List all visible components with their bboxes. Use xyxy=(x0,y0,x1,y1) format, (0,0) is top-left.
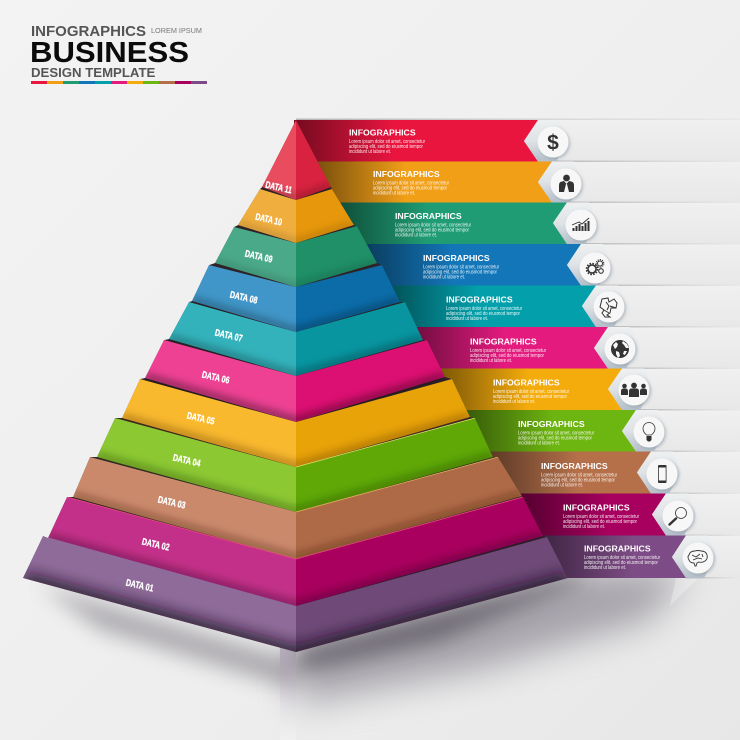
bar 5 teal: incididunt ut labore et. xyxy=(446,316,488,322)
bar 2 orange: Lorem ipsum dolor sit amet, consectetur xyxy=(373,180,449,186)
bar 7 amber: adipiscing elit, sed do eiusmod tempor xyxy=(493,394,567,400)
bar 11 purple: adipiscing elit, sed do eiusmod tempor xyxy=(584,560,658,566)
icon: phone xyxy=(646,458,678,490)
icon: magnifier xyxy=(662,500,694,532)
bar 1 red: adipiscing elit, sed do eiusmod tempor xyxy=(349,144,423,150)
bar 7 amber: Lorem ipsum dolor sit amet, consectetur xyxy=(493,389,569,395)
icon: dollar xyxy=(538,126,568,158)
label: data 01: DATA 01 xyxy=(125,578,155,595)
bar 10 magenta xyxy=(520,494,696,536)
bar 3 green: Lorem ipsum dolor sit amet, consectetur xyxy=(395,222,471,228)
layer 02 xyxy=(48,497,543,606)
bar 2 orange: incididunt ut labore et. xyxy=(373,190,415,196)
bar 2 orange xyxy=(316,162,582,202)
title: infographics: INFOGRAPHICS xyxy=(31,23,146,40)
bar 8 lime: adipiscing elit, sed do eiusmod tempor xyxy=(518,436,592,442)
bar 4 blue: incididunt ut labore et. xyxy=(423,274,465,280)
bar 7 amber: incididunt ut labore et. xyxy=(493,399,535,405)
bar 8 lime: Lorem ipsum dolor sit amet, consectetur xyxy=(518,430,594,436)
bar 6 pink: INFOGRAPHICS xyxy=(470,336,537,346)
bar 8 lime: incididunt ut labore et. xyxy=(518,440,560,446)
layer 05 xyxy=(122,379,470,467)
bar 8 lime xyxy=(464,410,666,452)
layer 03 xyxy=(73,457,522,559)
title: design template: DESIGN TEMPLATE xyxy=(31,65,156,80)
layer 04 xyxy=(97,418,493,512)
bar 10 magenta: incididunt ut labore et. xyxy=(563,524,605,530)
floor reflection xyxy=(46,578,696,720)
bar 11 purple: INFOGRAPHICS xyxy=(584,544,651,554)
bar 5 teal: Lorem ipsum dolor sit amet, consectetur xyxy=(446,306,522,312)
layer 06 xyxy=(145,340,445,422)
bar 3 green: INFOGRAPHICS xyxy=(395,211,462,221)
label: data 03: DATA 03 xyxy=(157,495,186,512)
color stripe xyxy=(31,81,207,84)
label: data 05: DATA 05 xyxy=(186,411,216,428)
bar 9 brown: adipiscing elit, sed do eiusmod tempor xyxy=(541,478,615,484)
bar 6 pink: Lorem ipsum dolor sit amet, consectetur xyxy=(470,348,546,354)
bar 8 lime: INFOGRAPHICS xyxy=(518,419,585,429)
icon: businessman xyxy=(550,168,582,200)
bar 5 teal xyxy=(388,286,626,327)
bar 9 brown: incididunt ut labore et. xyxy=(541,482,583,488)
bar 1 red xyxy=(294,120,568,162)
layer 01 xyxy=(23,536,568,654)
label: data 02: DATA 02 xyxy=(141,537,170,554)
title: business: BUSINESS xyxy=(30,37,189,69)
bar 7 amber: INFOGRAPHICS xyxy=(493,378,560,388)
background stripes right xyxy=(296,118,740,578)
icon: dollar: $ xyxy=(547,132,559,154)
icon: puzzle globe xyxy=(594,292,624,322)
bar 2 orange: INFOGRAPHICS xyxy=(373,169,440,179)
layer 09 xyxy=(215,226,377,287)
bar 10 magenta: Lorem ipsum dolor sit amet, consectetur xyxy=(563,514,639,520)
bar 4 blue xyxy=(363,244,611,286)
layer 11 xyxy=(262,120,331,200)
bar 9 brown xyxy=(488,452,681,494)
bar 6 pink: incididunt ut labore et. xyxy=(470,358,512,364)
bar 11 purple xyxy=(543,536,716,578)
bar 2 orange: adipiscing elit, sed do eiusmod tempor xyxy=(373,186,447,192)
bar 10 magenta: INFOGRAPHICS xyxy=(563,502,630,512)
icon: light bulb xyxy=(634,416,664,448)
bar 10 magenta: adipiscing elit, sed do eiusmod tempor xyxy=(563,519,637,525)
icon: brain xyxy=(682,542,714,574)
icon: chart xyxy=(566,210,596,240)
bar 4 blue: adipiscing elit, sed do eiusmod tempor xyxy=(423,270,497,276)
icon: globe xyxy=(604,334,636,364)
bar 1 red: INFOGRAPHICS xyxy=(349,128,416,138)
label: data 10: DATA 10 xyxy=(254,212,283,228)
icon: people xyxy=(618,374,650,406)
bar 4 blue: Lorem ipsum dolor sit amet, consectetur xyxy=(423,264,499,270)
pyramid labels xyxy=(125,180,293,595)
bar 9 brown: Lorem ipsum dolor sit amet, consectetur xyxy=(541,472,617,478)
label: data 04: DATA 04 xyxy=(172,453,202,470)
title block xyxy=(30,23,207,84)
subtitle: lorem ipsum: LOREM IPSUM xyxy=(151,26,202,35)
bar 1 red: incididunt ut labore et. xyxy=(349,149,391,155)
bar 9 brown: INFOGRAPHICS xyxy=(541,461,608,471)
bar 3 green: incididunt ut labore et. xyxy=(395,232,437,238)
layer 08 xyxy=(192,265,400,332)
label: data 06: DATA 06 xyxy=(201,370,230,387)
bar 3 green xyxy=(338,202,597,244)
layer 10 xyxy=(238,189,354,243)
pyramid dark base xyxy=(23,120,568,652)
label: data 08: DATA 08 xyxy=(229,290,259,307)
bar 11 purple: incididunt ut labore et. xyxy=(584,565,626,571)
icon: gears xyxy=(580,252,610,284)
bar 3 green: adipiscing elit, sed do eiusmod tempor xyxy=(395,228,469,234)
label: data 07: DATA 07 xyxy=(214,328,243,345)
bar 7 amber xyxy=(438,368,652,410)
bar 5 teal: INFOGRAPHICS xyxy=(446,294,513,304)
layer 07 xyxy=(169,302,423,376)
panel: info bars xyxy=(294,120,716,578)
bar 6 pink xyxy=(415,327,638,368)
bar 4 blue: INFOGRAPHICS xyxy=(423,253,490,263)
bar 11 purple: Lorem ipsum dolor sit amet, consectetur xyxy=(584,555,660,561)
bar 5 teal: adipiscing elit, sed do eiusmod tempor xyxy=(446,311,520,317)
bar 6 pink: adipiscing elit, sed do eiusmod tempor xyxy=(470,353,544,359)
bar 1 red: Lorem ipsum dolor sit amet, consectetur xyxy=(349,139,425,145)
label: data 11: DATA 11 xyxy=(264,180,293,197)
label: data 09: DATA 09 xyxy=(244,249,273,266)
pyramid xyxy=(23,120,568,654)
